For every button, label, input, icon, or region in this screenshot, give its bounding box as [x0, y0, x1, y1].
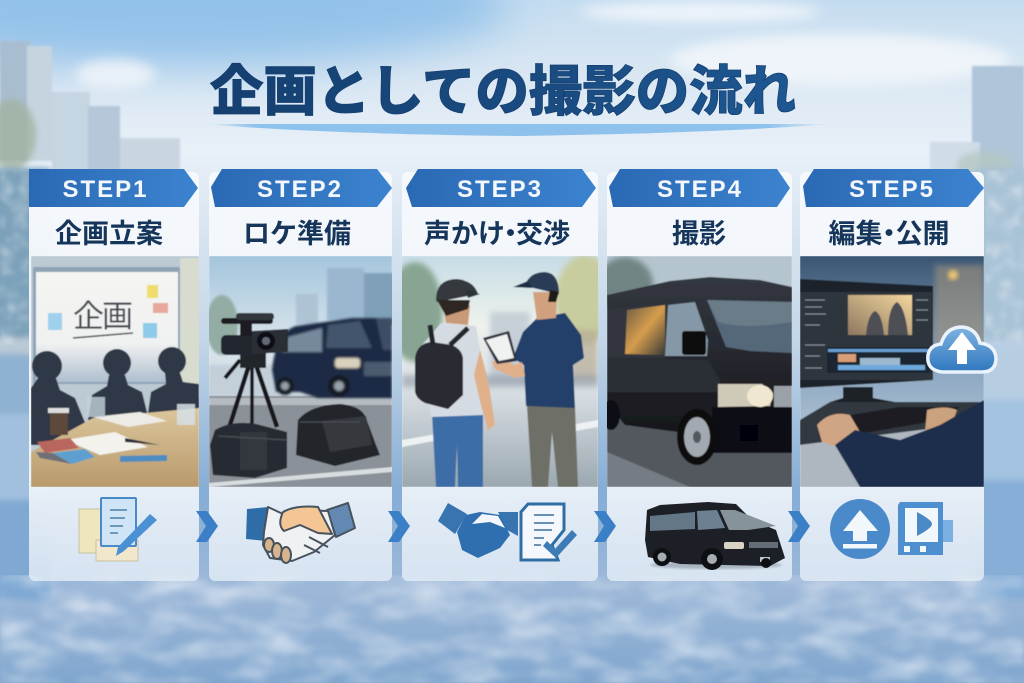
panel: step 1 — [29, 169, 200, 581]
icon: upload circle — [830, 499, 890, 559]
step 5 heading: 編集・公開 — [828, 219, 950, 249]
icon: cloud upload — [928, 327, 996, 372]
icon: handshake and contract — [438, 503, 577, 560]
icon: handshake light — [246, 503, 355, 563]
icon: van — [645, 502, 785, 570]
icon: blue handshake — [438, 503, 518, 558]
step 4 photo: van on location — [597, 256, 792, 487]
title: 企画としての撮影の流れ — [210, 62, 796, 122]
step 2 banner: STEP2 — [257, 176, 343, 203]
step 1 banner — [29, 169, 198, 207]
arrow 1 — [196, 511, 218, 542]
step 1 photo: planning meeting — [31, 256, 200, 487]
panel: step 5 — [800, 169, 996, 581]
step 3 banner — [406, 169, 596, 207]
step 4 banner: STEP4 — [657, 176, 743, 203]
step 1 heading: 企画立案 — [55, 219, 163, 249]
person left — [415, 279, 495, 487]
panel: step 4 — [597, 169, 792, 581]
step 2 banner — [211, 169, 392, 207]
step 3 banner: STEP3 — [457, 176, 543, 203]
step 3 heading: 声かけ・交渉 — [424, 219, 570, 249]
panel: step 2 — [206, 169, 394, 581]
step 5 photo: video editing — [800, 256, 984, 487]
step 2 photo: camera and van — [206, 256, 394, 487]
step 1 photo: planning meeting: 企画 — [73, 299, 133, 334]
panel: step 3 — [402, 169, 598, 581]
icon: upload and video — [830, 499, 953, 559]
icon: contract check — [521, 504, 577, 560]
arrow 4 — [788, 511, 810, 542]
arrow 3 — [594, 511, 616, 542]
step 2 heading: ロケ準備 — [243, 219, 351, 249]
step 4 heading: 撮影 — [672, 219, 726, 249]
step 4 banner — [609, 169, 790, 207]
step 5 banner — [803, 169, 984, 207]
icon: video file — [898, 502, 953, 555]
arrow 2 — [388, 511, 410, 542]
person right — [483, 272, 584, 487]
step 5 banner: STEP5 — [849, 176, 935, 203]
step 3 photo: talking staff — [402, 256, 598, 487]
icon: documents and pencil — [79, 498, 157, 561]
step 1 banner: STEP1 — [62, 176, 149, 203]
